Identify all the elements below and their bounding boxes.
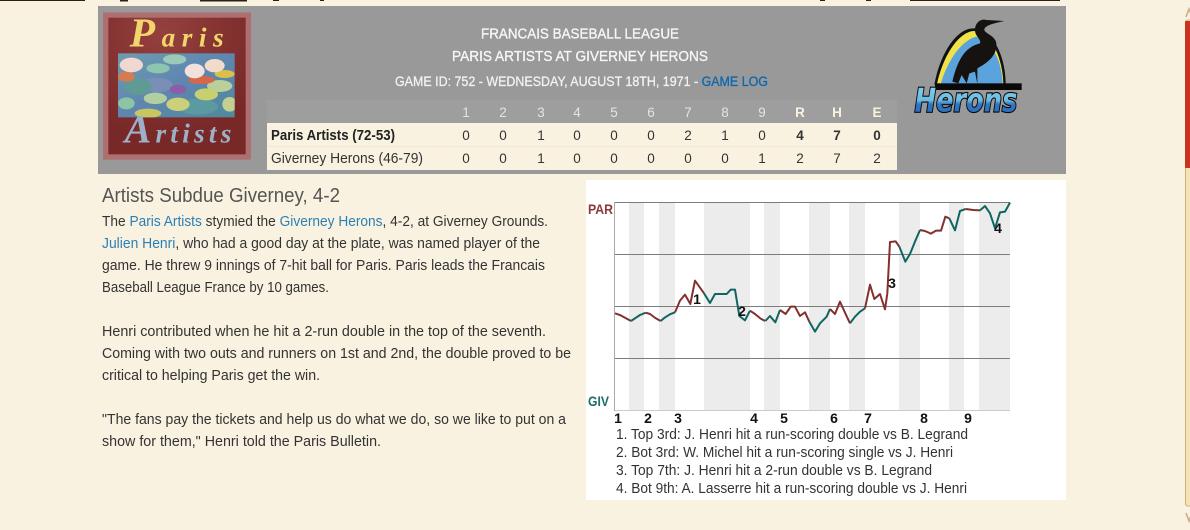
panel: game header: [98, 6, 1066, 174]
article text: [102, 214, 571, 450]
chart: play markers: 2: [738, 303, 746, 319]
box score: Paris row: 0: [873, 128, 881, 143]
box score: Giverney row: 1: [758, 151, 766, 166]
box score: Paris row: 0: [610, 128, 618, 143]
box score: Giverney row: 0: [462, 151, 470, 166]
box score: Giverney row: 1: [537, 151, 545, 166]
chart: win probability line: [615, 203, 1010, 332]
box score: inning headers: H: [832, 105, 842, 120]
box score: Paris row: [271, 128, 881, 144]
box score: inning headers: 6: [647, 105, 655, 120]
article text: The Paris Artists stymied the Giverney Herons, 4-2, at Giverney Grounds.: [102, 214, 548, 230]
logo: Giverney Herons: [915, 20, 1022, 119]
panel: win probability chart: [586, 180, 1066, 500]
box score: Paris row: 7: [833, 128, 841, 143]
article text: critical to helping Paris get the win.: [102, 368, 320, 384]
logo: Paris Artists: [103, 11, 251, 160]
box score: Giverney row: 0: [684, 151, 692, 166]
box score: Paris row: 0: [462, 128, 470, 143]
article text: Coming with two outs and runners on 1st and 2nd, the double proved to be: [102, 346, 571, 362]
article text: game. He threw 9 innings of 7-hit ball for Paris. Paris leads the Francais: [102, 258, 545, 274]
box score: Paris row: Paris Artists (72-53): [271, 128, 395, 144]
box score: Giverney row: 0: [610, 151, 618, 166]
chart: play markers: 3: [888, 275, 896, 291]
article headline: Artists Subdue Giverney, 4-2: [102, 185, 340, 207]
box score: inning headers: 9: [758, 105, 766, 120]
article text: Julien Henri, who had a good day at the plate, was named player of the: [102, 236, 540, 252]
box score: inning headers: 8: [721, 105, 729, 120]
logo: Giverney Herons: Herons: [915, 81, 1017, 119]
box score: Giverney row: [271, 151, 881, 167]
chart: key plays legend: [616, 427, 968, 497]
chart: key plays legend: 4. Bot 9th: A. Lasserre hit a run-scoring double vs J. Henri: [616, 481, 967, 497]
box score: Paris row: 0: [499, 128, 507, 143]
header: league name: FRANCAIS BASEBALL LEAGUE: [481, 26, 679, 42]
box score: Giverney row: 2: [873, 151, 881, 166]
chart: inning labels: 2: [644, 410, 652, 426]
chart: PAR axis label: PAR: [588, 201, 613, 217]
box score: inning headers: 3: [537, 105, 545, 120]
box score: Giverney row: 2: [796, 151, 804, 166]
box score: Paris row: 1: [721, 128, 729, 143]
box score: Giverney row: 0: [647, 151, 655, 166]
article text: Baseball League France by 10 games.: [102, 280, 329, 296]
box score: inning headers: E: [872, 105, 882, 120]
chart: inning labels: [614, 410, 972, 426]
box score: Paris row: 0: [758, 128, 766, 143]
chart: inning labels: 4: [750, 410, 758, 426]
scrollbar: [1185, 9, 1190, 521]
box score: inning headers: [462, 105, 882, 120]
box score: inning headers: 5: [610, 105, 618, 120]
logo: Paris Artists: Artists: [122, 107, 231, 152]
article text: "The fans pay the tickets and help us do what we do, so we like to put on a: [102, 412, 567, 428]
chart: play markers: [693, 220, 1002, 319]
article text: Henri contributed when he hit a 2-run double in the top of the seventh.: [102, 324, 546, 340]
box score: Paris row: 0: [573, 128, 581, 143]
box score: Giverney row: 7: [833, 151, 841, 166]
chart: half-inning shading: [629, 203, 1010, 410]
chart: key plays legend: 1. Top 3rd: J. Henri hit a run-scoring double vs B. Legrand: [616, 427, 968, 443]
box score: inning headers: 2: [499, 105, 507, 120]
box score: inning headers: R: [795, 105, 805, 120]
box score: Paris row: 1: [537, 128, 545, 143]
box score: inning headers: 7: [684, 105, 692, 120]
box score: inning headers: 4: [573, 105, 581, 120]
chart: inning labels: 9: [964, 410, 972, 426]
chart: play markers: 4: [994, 220, 1002, 236]
chart: key plays legend: 3. Top 7th: J. Henri hit a 2-run double vs B. Legrand: [616, 463, 932, 479]
chart: play markers: 1: [693, 291, 701, 307]
chart: inning labels: 3: [674, 410, 682, 426]
article text: show for them," Henri told the Paris Bulletin.: [102, 434, 381, 450]
chart: GIV axis label: GIV: [588, 393, 610, 409]
box score table: [267, 100, 897, 170]
chart: inning labels: 7: [864, 410, 872, 426]
chart: inning labels: 8: [920, 410, 928, 426]
logo: Paris Artists: Paris: [129, 11, 224, 57]
box score: Giverney row: Giverney Herons (46-79): [271, 151, 423, 167]
box score: Giverney row: 0: [573, 151, 581, 166]
header: matchup: PARIS ARTISTS AT GIVERNEY HERONS: [452, 49, 708, 65]
top edge strip: [0, 0, 1060, 2]
chart: key plays legend: 2. Bot 3rd: W. Michel hit a run-scoring single vs J. Henri: [616, 445, 953, 461]
box score: inning headers: 1: [462, 105, 470, 120]
header: game details: GAME ID: 752 - WEDNESDAY, AUGUST 18TH, 1971 - GAME LOG: [395, 74, 768, 89]
chart: inning labels: 6: [830, 410, 838, 426]
chart: inning labels: 1: [614, 410, 622, 426]
box score: Paris row: 0: [647, 128, 655, 143]
chart: inning labels: 5: [780, 410, 788, 426]
box score: Giverney row: 0: [721, 151, 729, 166]
box score: Paris row: 2: [684, 128, 692, 143]
box score: Giverney row: 0: [499, 151, 507, 166]
box score: Paris row: 4: [796, 128, 804, 143]
